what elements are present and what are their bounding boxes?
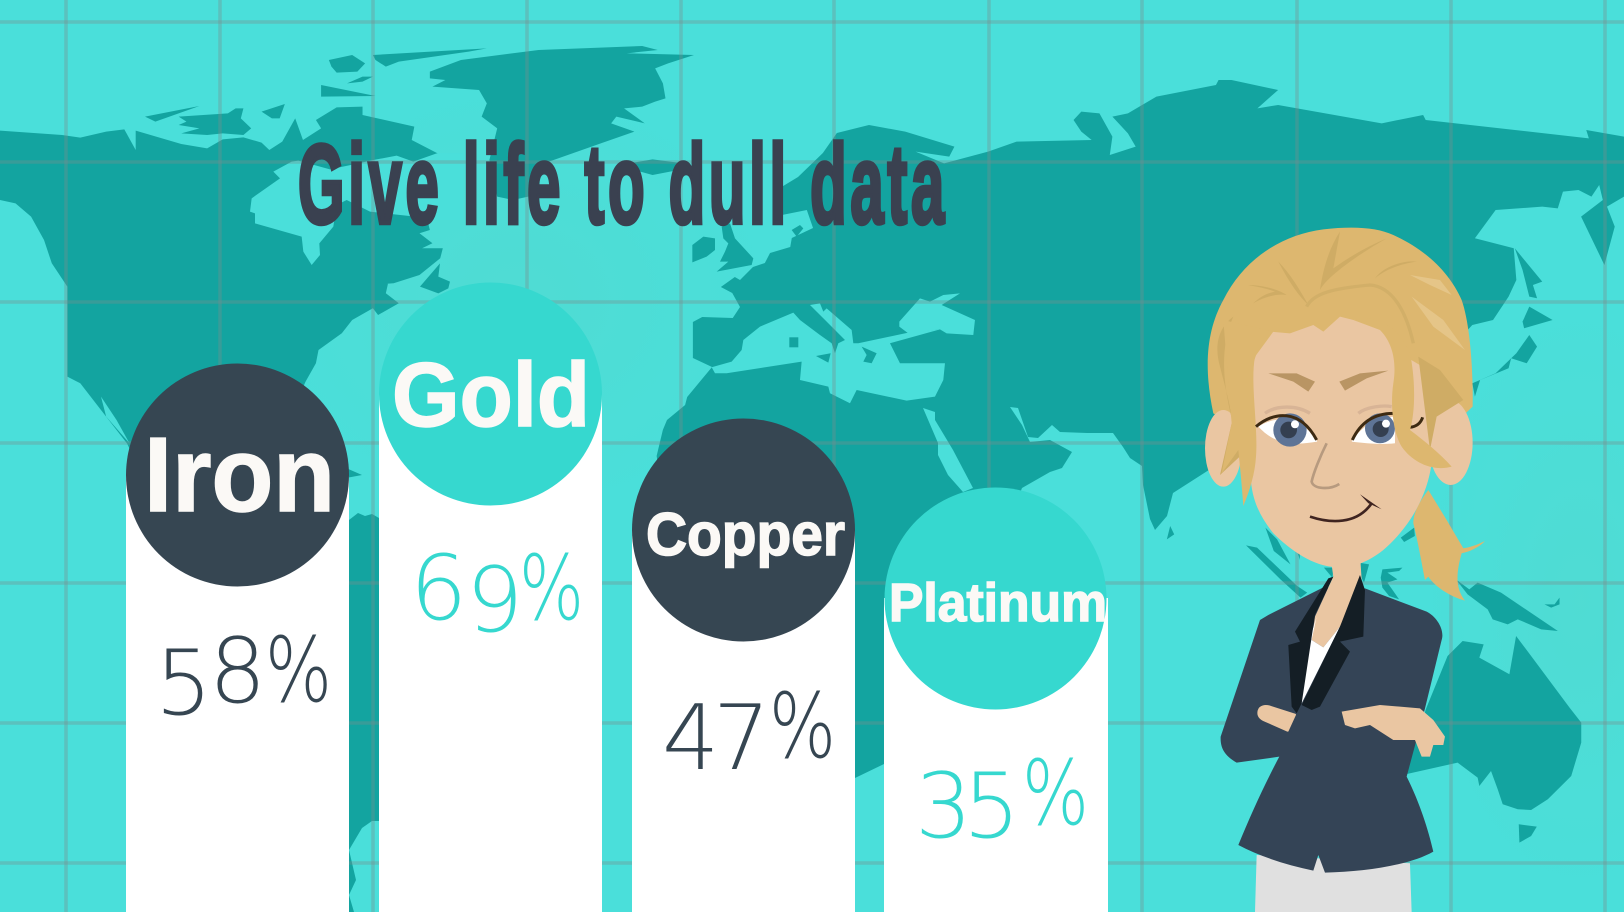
value: 35%	[915, 741, 1089, 859]
skirt	[1255, 855, 1412, 912]
circle: Platinum	[884, 488, 1106, 710]
Cuba fragment	[346, 468, 362, 478]
bar: Platinum 35%	[884, 488, 1108, 912]
Southeast Asia and Oceania	[1167, 526, 1581, 843]
Greenland	[430, 46, 694, 200]
right hair strand	[1353, 319, 1452, 468]
Europe detail	[692, 223, 975, 403]
South America fragment	[349, 513, 379, 912]
circle: Iron	[126, 364, 349, 586]
title: Give life to dull data	[298, 122, 948, 247]
lapels	[1288, 575, 1365, 713]
head	[1205, 228, 1485, 601]
Indian Ocean	[855, 407, 1300, 912]
darker hair	[1217, 232, 1463, 475]
circle: Copper	[632, 418, 855, 642]
Denmark	[792, 225, 803, 237]
Mediterranean islands	[789, 337, 798, 347]
value: 69%: %	[519, 536, 584, 641]
jacket and hands	[1221, 553, 1445, 873]
North America	[0, 107, 443, 500]
ears	[1205, 410, 1242, 487]
bar: Gold 69%	[379, 282, 602, 912]
neck	[1312, 553, 1362, 647]
eye shadow	[1265, 406, 1392, 413]
right hand	[1342, 705, 1445, 757]
value: 58%	[155, 618, 332, 736]
Mediterranean Sea	[712, 303, 945, 403]
Red Sea	[923, 408, 973, 492]
Japan	[1523, 307, 1553, 328]
Eurasia and Africa	[657, 80, 1624, 800]
mouth	[1310, 503, 1372, 521]
label: Platinum: Platinum	[889, 573, 1107, 633]
eyebrows	[1268, 371, 1388, 392]
Black Sea	[899, 293, 975, 335]
hair	[1208, 228, 1473, 450]
jacket	[1221, 587, 1442, 873]
label: Iron: Iron	[144, 416, 335, 534]
value: 35%: 35	[915, 754, 1020, 859]
value: 47%: %	[769, 674, 836, 779]
label: Gold: Gold	[392, 345, 590, 446]
value: 35%: %	[1022, 741, 1089, 846]
nose	[1312, 443, 1339, 488]
value: 58%: 58	[155, 619, 266, 736]
face	[1251, 317, 1432, 567]
value: 69%: 69	[410, 536, 523, 653]
shirt	[1302, 617, 1340, 703]
Australia	[1406, 636, 1581, 810]
light hair	[1410, 275, 1465, 350]
left hand	[1258, 706, 1295, 731]
Arctic islands and Greenland	[145, 46, 694, 200]
Iceland	[629, 159, 684, 175]
bar: Copper 47%	[632, 418, 855, 912]
Ireland	[692, 237, 715, 262]
Hudson Bay and Newfoundland	[250, 153, 463, 293]
value: 47%: 47	[662, 686, 770, 791]
label: Copper: Copper	[646, 501, 845, 568]
value: 69%	[410, 536, 584, 653]
left eye	[1256, 413, 1317, 447]
value: 58%: %	[265, 618, 332, 723]
wink	[1410, 417, 1423, 427]
Tasmania	[1519, 824, 1537, 843]
left hair strand	[1222, 320, 1273, 506]
ponytail	[1413, 490, 1485, 601]
Sakhalin	[1515, 248, 1542, 298]
bar: Iron 58%	[126, 364, 349, 912]
right eye	[1352, 413, 1395, 444]
Great Britain	[717, 223, 753, 272]
circle: Gold	[379, 282, 602, 506]
character: businesswoman	[1205, 228, 1485, 912]
value: 47%	[662, 674, 836, 791]
